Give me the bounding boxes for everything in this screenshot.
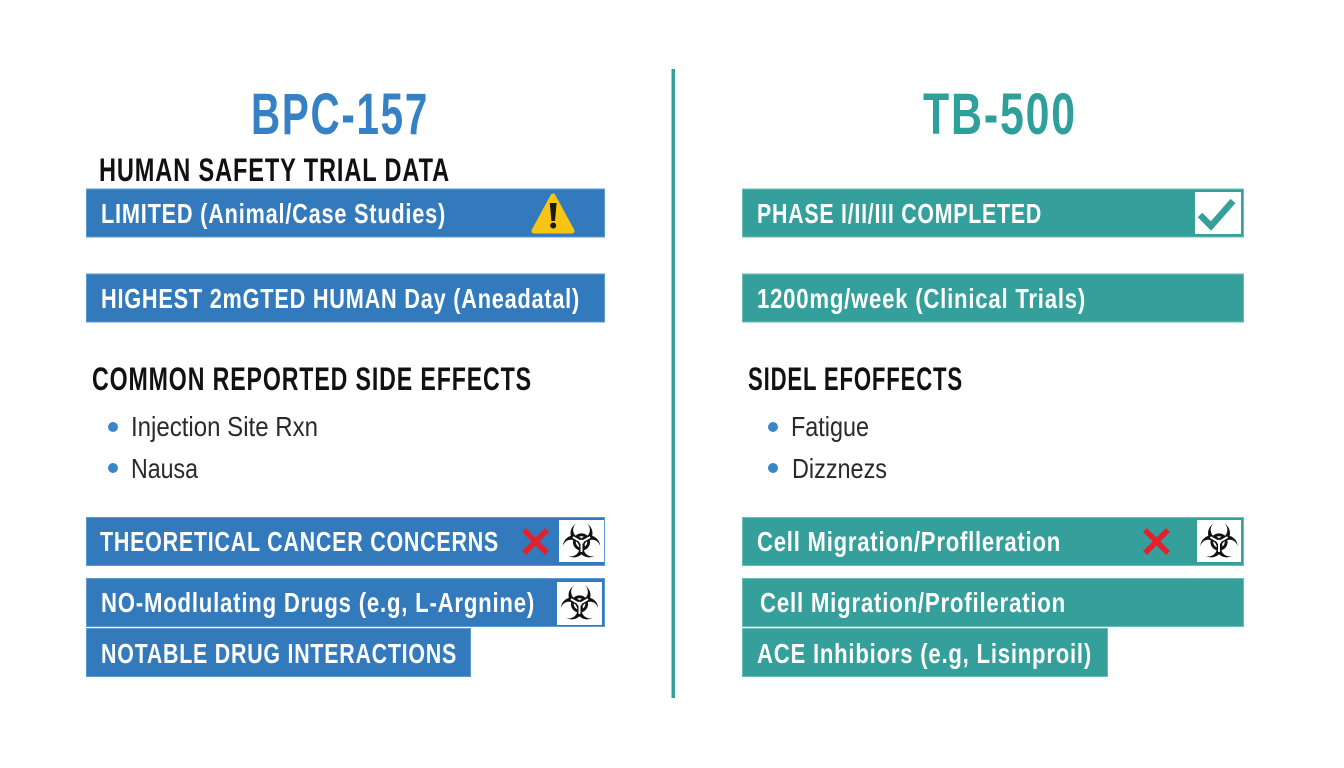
heading: side effects: SIDEL EFOFFECTS	[748, 361, 963, 397]
list: side effects	[108, 411, 318, 484]
bar: theoretical cancer concerns	[86, 518, 605, 566]
bar: cell migration: Cell Migration/Profileration	[760, 587, 1066, 618]
panel: TB-500 column	[742, 82, 1244, 676]
bar: cell migration with warning icons: Cell Migration/Proflleration	[757, 526, 1061, 557]
bar: highest tested human dose: HIGHEST 2mGTED HUMAN Day (Aneadatal)	[101, 283, 580, 314]
icon: biohazard	[556, 582, 603, 625]
icon: red cross	[524, 530, 547, 553]
panel: BPC-157 column	[86, 82, 605, 676]
list: side effects: Dizznezs	[792, 453, 887, 484]
bar: phase trials completed: PHASE I/II/III COMPLETED	[757, 198, 1042, 229]
list: side effects	[768, 411, 887, 484]
bar: dose	[742, 274, 1244, 322]
heading: human safety trial data: HUMAN SAFETY TRIAL DATA	[99, 152, 450, 188]
bar: ACE inhibitors	[742, 628, 1108, 676]
bar: cell migration with warning icons	[742, 518, 1244, 566]
icon: check mark	[1195, 192, 1241, 234]
bar: notable drug interactions	[86, 628, 470, 676]
list: side effects: Fatigue	[791, 411, 869, 442]
bar: NO-modulating drugs	[86, 578, 604, 626]
heading: common reported side effects: COMMON REPORTED SIDE EFFECTS	[92, 361, 532, 397]
title: TB-500: TB-500	[923, 82, 1077, 147]
bar: phase trials completed	[742, 189, 1244, 237]
bar: highest tested human dose	[86, 274, 604, 322]
bar: notable drug interactions: NOTABLE DRUG INTERACTIONS	[101, 638, 457, 669]
bar: cell migration	[742, 578, 1244, 626]
divider between columns	[672, 69, 675, 698]
icon: biohazard	[1196, 520, 1242, 562]
bar: NO-modulating drugs: NO-Modlulating Drugs (e.g, L-Argnine)	[101, 587, 535, 618]
icon: red cross	[1145, 530, 1168, 553]
list: side effects: Injection Site Rxn	[131, 411, 318, 442]
title: BPC-157: BPC-157	[251, 82, 429, 147]
icon: biohazard	[558, 520, 605, 562]
bar: theoretical cancer concerns: THEORETICAL CANCER CONCERNS	[100, 526, 499, 557]
list: side effects: Nausa	[131, 453, 198, 484]
bar: dose: 1200mg/week (Clinical Trials)	[757, 283, 1086, 314]
icon: warning triangle	[534, 196, 572, 231]
bar: ACE inhibitors: ACE Inhibiors (e.g, Lisinproil)	[757, 638, 1092, 669]
bar: limited data	[86, 189, 604, 237]
bar: limited data: LIMITED (Animal/Case Studies)	[101, 198, 446, 229]
